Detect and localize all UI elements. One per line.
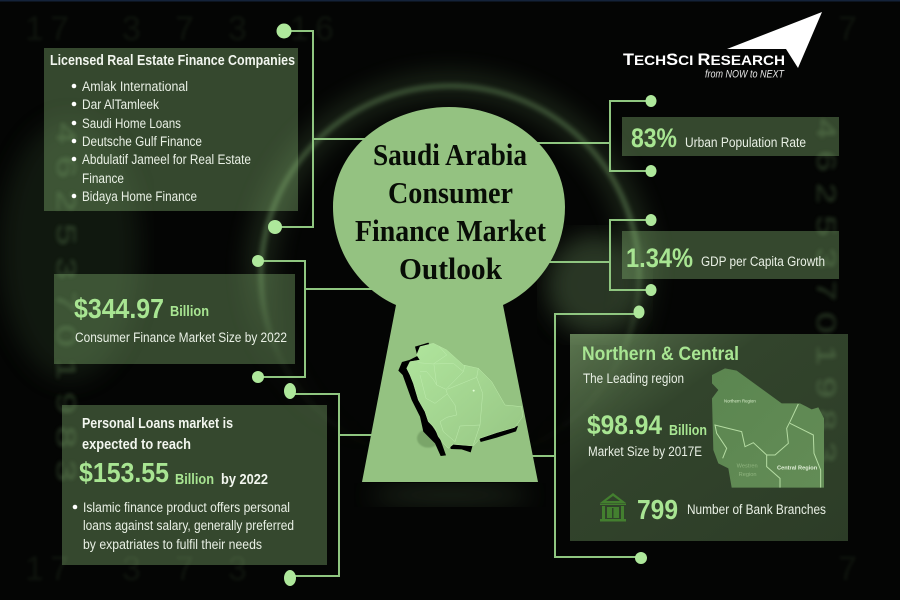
background: 7 (50, 550, 69, 588)
region map: Westren (737, 463, 758, 469)
personal loans note: by expatriates to fulfil their needs (83, 537, 262, 552)
list: companies: Abdulatif Jameel for Real Estate (82, 152, 251, 167)
urban population label: Urban Population Rate (685, 135, 806, 150)
connector: licensed companies (268, 24, 380, 234)
panel: GDP growth (622, 231, 839, 279)
connector: GDP (540, 214, 656, 296)
background: 7 (838, 550, 857, 588)
heading: licensed companies: Licensed Real Estate Finance Companies (50, 53, 295, 69)
background: 7 (50, 10, 69, 48)
background: 4 6 2 5 3 7 0 1 9 8 3 (51, 122, 81, 482)
background: 1 (25, 10, 44, 48)
connector: urban population (530, 95, 656, 177)
market size value: $344.97 (74, 293, 164, 324)
list: companies: Finance (82, 171, 124, 186)
keyhole (333, 107, 565, 482)
GDP label: GDP per Capita Growth (701, 254, 825, 269)
region map: Central Region (777, 465, 818, 471)
map: Saudi Arabia (398, 343, 523, 456)
background: 3 (228, 10, 247, 48)
title: Saudi Arabia (373, 137, 527, 172)
title (355, 137, 547, 286)
personal loans value: $153.55 (79, 457, 169, 488)
region map (712, 368, 824, 488)
region value: $98.94 (587, 410, 662, 440)
panel: urban population (622, 117, 839, 156)
background: 3 (122, 550, 141, 588)
market size unit: Billion (170, 304, 209, 320)
background: 1 (25, 550, 44, 588)
panel: northern and central (570, 334, 848, 541)
personal loans note (73, 500, 294, 552)
list: companies (72, 79, 251, 204)
list: companies: Amlak International (82, 79, 188, 94)
GDP value: 1.34% (626, 243, 693, 273)
branches label: Number of Bank Branches (687, 502, 826, 517)
panel: market size (54, 274, 295, 364)
logo (623, 12, 822, 80)
title: Finance Market (355, 213, 547, 248)
logo tagline: from NOW to NEXT (705, 68, 785, 80)
personal loans note: Islamic finance product offers personal (83, 500, 290, 515)
background: 3 (228, 550, 247, 588)
logo wordmark: TECHSCI RESEARCH (623, 51, 785, 69)
title: Consumer (388, 175, 513, 210)
urban population value: 83% (631, 123, 677, 153)
region map: Northern Region (724, 398, 756, 403)
icon: bank (600, 493, 626, 522)
region unit: Billion (669, 423, 707, 439)
panel: personal loans (62, 405, 327, 565)
title: Outlook (399, 251, 503, 286)
logo arrow (727, 12, 822, 68)
list: companies: Bidaya Home Finance (82, 189, 197, 204)
personal loans unit: Billion (175, 472, 214, 488)
list: companies: Saudi Home Loans (82, 116, 181, 131)
background: 3 (122, 10, 141, 48)
background: 1 (290, 10, 309, 48)
background: 4 6 2 5 3 7 0 1 9 8 3 (811, 118, 841, 463)
connector: market size (252, 255, 380, 383)
connector: northern and central (525, 306, 647, 564)
region heading: Northern & Central (582, 343, 739, 365)
heading: personal loans: Personal Loans market is (82, 416, 233, 432)
region caption: Market Size by 2017E (588, 444, 702, 459)
connector: personal loans (284, 383, 375, 586)
background: 6 (315, 10, 334, 48)
region map: Region (739, 472, 757, 478)
panel: licensed companies (44, 48, 298, 211)
list: companies: Dar AlTamleek (82, 97, 159, 112)
market size caption: Consumer Finance Market Size by 2022 (75, 330, 287, 345)
personal loans note: loans against salary, generally preferred (83, 518, 294, 533)
personal loans year: by 2022 (221, 472, 268, 488)
background: 7 (838, 10, 857, 48)
heading line two: expected to reach (82, 437, 191, 453)
list: companies: Deutsche Gulf Finance (82, 134, 202, 149)
branches value: 799 (637, 494, 678, 525)
background: 7 (175, 10, 194, 48)
background: 7 (175, 550, 194, 588)
region subheading: The Leading region (583, 371, 684, 386)
